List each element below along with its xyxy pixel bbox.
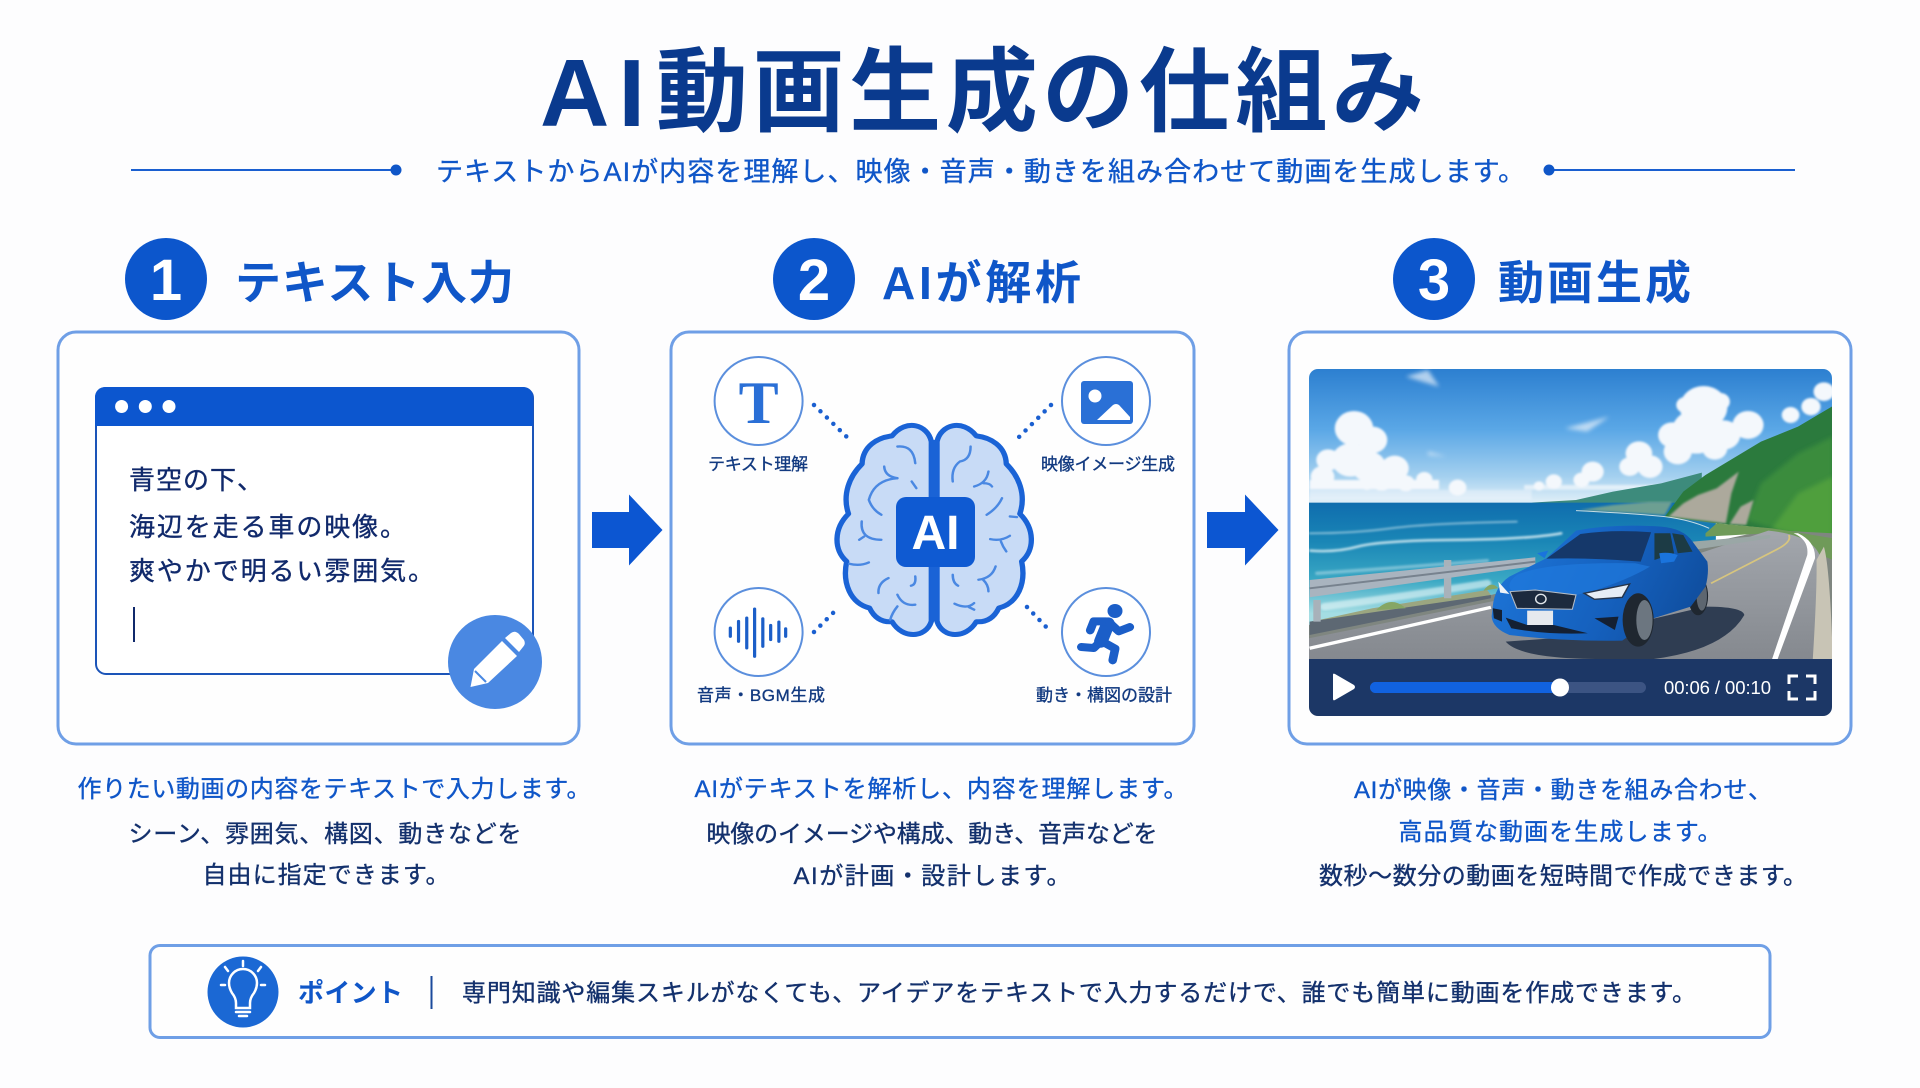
point text: 専門知識や編集スキルがなくても、アイデアをテキストで入力するだけで、誰でも簡単に動画を作成できます。 (462, 980, 1696, 1007)
step 1 heading: 1 (150, 248, 182, 313)
arrow: step 1 to 2 (592, 494, 662, 566)
text block: step 3 description (1319, 777, 1807, 890)
step 1 heading (125, 238, 514, 320)
wispy clouds (1406, 370, 1609, 457)
road (1309, 531, 1823, 659)
label: text understanding: テキスト理解 (708, 455, 808, 474)
sea (1309, 503, 1716, 629)
panel: video generation (1289, 332, 1851, 744)
guardrail (1310, 595, 1491, 635)
prompt text: 爽やかで明るい雰囲気。 (129, 556, 434, 586)
step 3 heading: 3 (1418, 248, 1450, 313)
play button (1333, 674, 1355, 700)
icon: AI brain: AI (912, 507, 960, 560)
player control bar (1309, 659, 1832, 716)
windows (1546, 531, 1651, 562)
icon: text understanding: T (739, 370, 779, 436)
text block: step 2 description: 映像のイメージや構成、動き、音声などを (706, 821, 1158, 848)
step 3 heading (1393, 238, 1691, 320)
step 3 heading: 動画生成 (1498, 257, 1691, 309)
subtitle with side rules: テキストからAIが内容を理解し、映像・音声・動きを組み合わせて動画を生成します。 (436, 157, 1525, 187)
text block: step 2 description (694, 776, 1188, 890)
icon: lightbulb (208, 956, 278, 1028)
prompt text: 海辺を走る車の映像。 (129, 512, 406, 542)
icon: AI brain (837, 425, 1031, 635)
label: image generation: 映像イメージ生成 (1041, 455, 1175, 474)
wing mirror (1659, 553, 1678, 563)
main mountain (1665, 406, 1833, 543)
arrow: step 2 to 3 (1207, 494, 1278, 566)
text block: step 1 description: 作りたい動画の内容をテキストで入力します。 (78, 776, 590, 803)
icon: text understanding (715, 357, 803, 445)
car body (1492, 526, 1708, 641)
text cursor (133, 607, 135, 642)
step 2 heading (773, 238, 1081, 320)
video scene: seaside road with blue car (1309, 369, 1834, 716)
text block: step 3 description: 数秒〜数分の動画を短時間で作成できます。 (1319, 863, 1807, 890)
subtitle with side rules (131, 157, 1795, 187)
browser window (95, 387, 533, 674)
label: point: ポイント (298, 978, 403, 1008)
plate (1527, 611, 1553, 625)
car shadow (1506, 607, 1744, 659)
clouds (1310, 382, 1834, 500)
icon: fullscreen (1789, 676, 1815, 699)
headlight (1584, 584, 1630, 599)
wheels back (1690, 584, 1708, 616)
icon: image (1062, 357, 1150, 445)
prompt text (129, 465, 434, 586)
step 2 heading: AIが解析 (882, 257, 1081, 309)
grille (1510, 590, 1576, 609)
progress bar (1370, 678, 1646, 696)
label: audio generation: 音声・BGM生成 (697, 686, 825, 705)
front wheel (1623, 593, 1654, 647)
connector dots (814, 405, 1051, 632)
label: motion design: 動き・構図の設計 (1036, 686, 1172, 705)
icon: runner (1062, 588, 1150, 676)
step 1 heading: テキスト入力 (235, 257, 514, 309)
prompt text: 青空の下、 (129, 465, 263, 495)
text block: step 3 description: 高品質な動画を生成します。 (1398, 819, 1722, 846)
title: AI (540, 40, 645, 147)
text block: step 1 description: シーン、雰囲気、構図、動きなどを (128, 821, 522, 848)
lower bumper (1506, 618, 1588, 634)
title: 動画生成の仕組み (656, 42, 1424, 144)
far hills (1532, 472, 1702, 503)
panel: text input (58, 332, 579, 744)
step 2 heading: 2 (798, 248, 830, 313)
text block: step 2 description: AIがテキストを解析し、内容を理解します。 (694, 776, 1188, 803)
icon: pencil (448, 615, 542, 709)
road markings (1310, 607, 1491, 648)
text block: step 2 description: AIが計画・設計します。 (794, 863, 1070, 890)
roadside (1309, 531, 1832, 638)
text block: step 1 description: 自由に指定できます。 (202, 862, 450, 889)
panel: AI analysis (671, 332, 1194, 744)
text block: step 3 description: AIが映像・音声・動きを組み合わせ、 (1354, 777, 1772, 804)
time display: 00:06 / 00:10 (1664, 677, 1771, 698)
text block: step 1 description (78, 776, 590, 889)
icon: audio wave (715, 588, 803, 676)
shoreline (1576, 511, 1709, 528)
panel: point callout (150, 946, 1770, 1038)
